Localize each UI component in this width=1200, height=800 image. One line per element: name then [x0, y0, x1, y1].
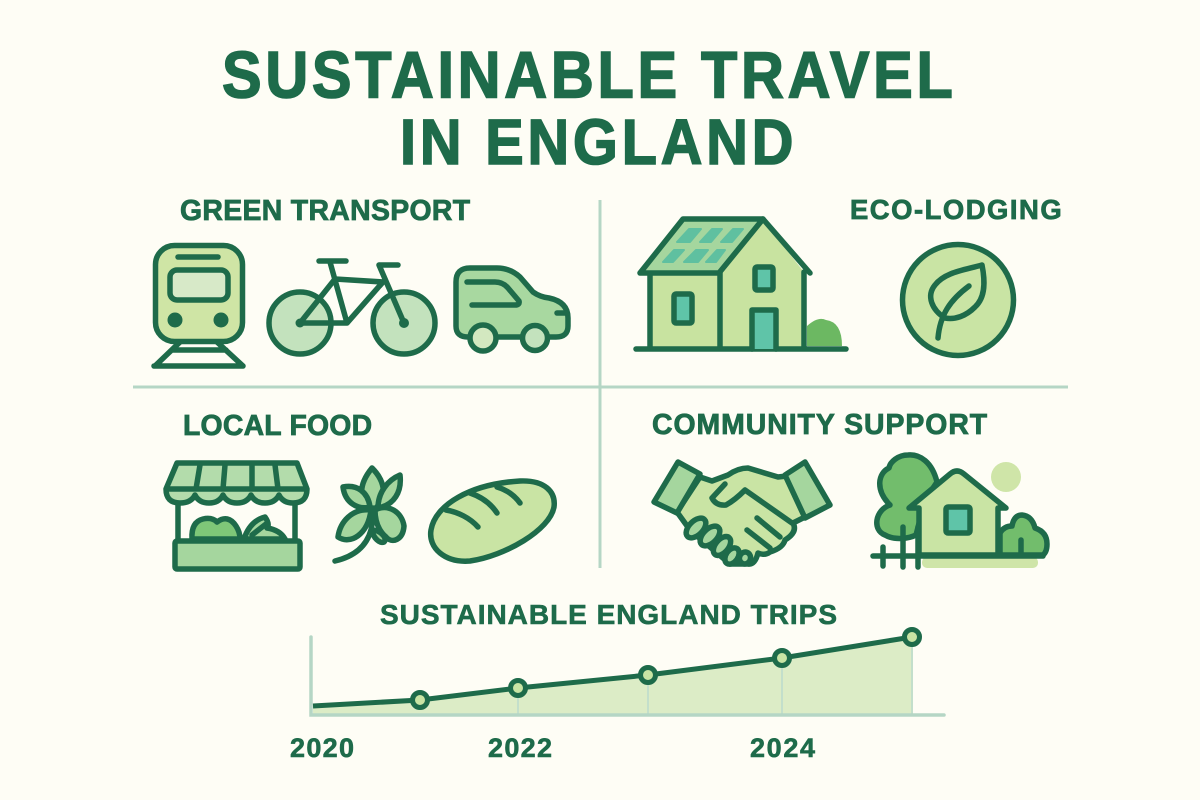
trend line: [313, 637, 912, 706]
produce: [192, 518, 240, 539]
panel: green transport: [154, 195, 568, 366]
year labels: 2022: [488, 733, 552, 763]
icon: market stall: [166, 463, 307, 569]
icon: house with trees: [873, 455, 1047, 568]
year labels: [290, 733, 815, 763]
panel: eco-lodging: [636, 194, 1062, 356]
tree: [877, 455, 937, 538]
icon: car: [456, 268, 568, 351]
year labels: 2020: [290, 733, 354, 763]
solar panels: [663, 229, 743, 262]
area under line: [313, 637, 912, 715]
awning: [166, 463, 307, 503]
icon: herb sprig: [335, 468, 404, 561]
heading: eco-lodging: ECO-LODGING: [850, 194, 1062, 225]
icon: house with solar roof: [636, 219, 846, 349]
heading: green transport: GREEN TRANSPORT: [180, 195, 471, 227]
heading: community support: COMMUNITY SUPPORT: [652, 409, 988, 441]
title: IN ENGLAND: [400, 106, 793, 178]
icon: handshake: [654, 462, 830, 567]
icon: bread loaf: [431, 481, 554, 561]
icon: bicycle: [269, 261, 435, 354]
heading: local food: LOCAL FOOD: [183, 410, 372, 442]
panel: community support: [652, 409, 1047, 568]
bush: [807, 319, 842, 346]
chart title: SUSTAINABLE ENGLAND TRIPS: [380, 599, 837, 630]
data points: [412, 630, 920, 708]
year labels: 2024: [750, 733, 815, 763]
title: SUSTAINABLE TRAVEL: [222, 39, 953, 112]
icon: leaf in circle: [902, 244, 1014, 356]
title: [222, 39, 953, 178]
axes: [311, 637, 944, 715]
panel: local food: [166, 410, 554, 569]
chart: sustainable England trips: [290, 599, 944, 763]
icon: train: [154, 246, 243, 366]
bush: [1000, 515, 1047, 555]
sun: [991, 462, 1021, 492]
